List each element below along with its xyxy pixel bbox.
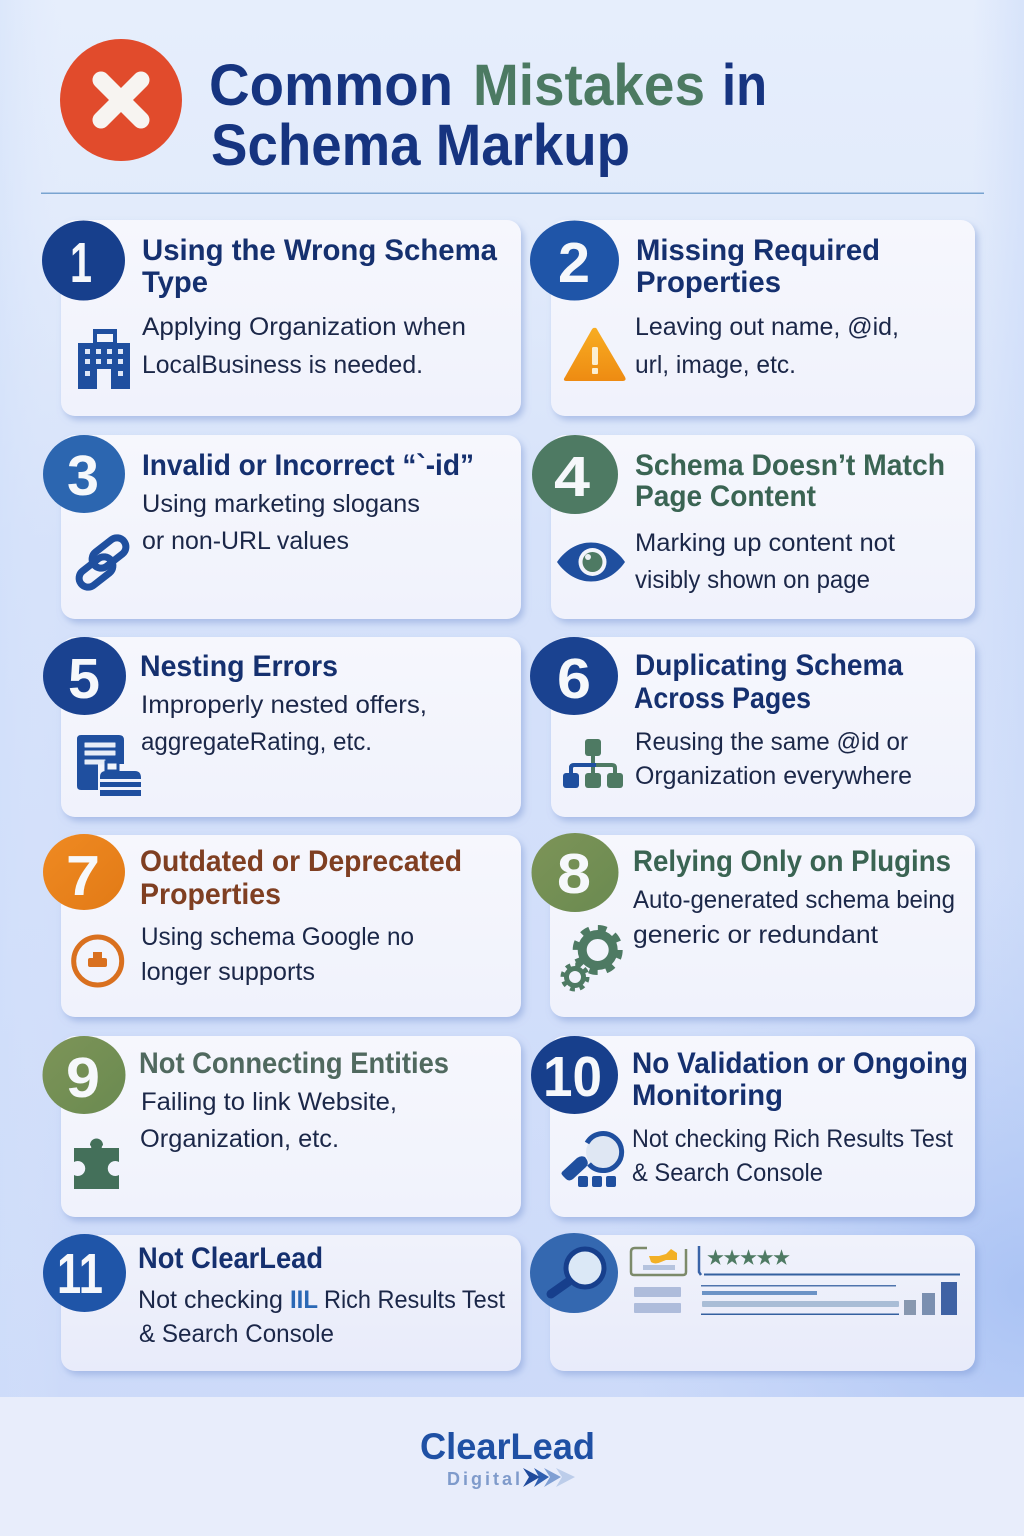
header icon: red circle with X [60, 39, 182, 161]
card 5 number badge [43, 637, 126, 715]
card 6 heading: Across Pages [634, 682, 811, 715]
card 11 body text: Rich Results Test [324, 1286, 505, 1314]
card 2 number badge [530, 220, 619, 300]
title: Mistakes [473, 53, 705, 118]
result thumbnail [631, 1248, 686, 1313]
card 4 number badge: 4 [554, 445, 590, 509]
card 7 heading: Outdated or Deprecated [140, 845, 462, 878]
card 2 number badge: 2 [558, 231, 590, 295]
card 6: duplicating schema [530, 637, 975, 817]
card 4 number badge [532, 435, 618, 514]
card 9 body text: Organization, etc. [140, 1125, 339, 1153]
card 6 number badge: 6 [557, 647, 591, 711]
card 9: not connecting entities [42, 1036, 521, 1217]
card 1 body text: LocalBusiness is needed. [142, 351, 423, 379]
card 1 heading [142, 234, 497, 299]
card 3: invalid id [43, 435, 521, 619]
card 12: rich results preview [530, 1233, 975, 1371]
card 10 panel [550, 1036, 975, 1217]
card 8 body text: Auto-generated schema being [633, 886, 955, 914]
card 5 panel [61, 637, 521, 817]
card 10 number badge: 10 [543, 1045, 602, 1109]
card 7: outdated properties [43, 834, 521, 1017]
card 11: not ClearLead [43, 1234, 521, 1371]
card 6 body text [635, 728, 912, 790]
icon: warning triangle [564, 328, 626, 381]
card 9 heading: Not Connecting Entities [139, 1047, 449, 1080]
card 8 number badge: 8 [557, 842, 591, 906]
card 8: relying only on plugins [532, 833, 975, 1017]
card 10 heading: Monitoring [632, 1079, 783, 1112]
card 11 heading: Not ClearLead [138, 1242, 323, 1275]
title: Common [209, 53, 453, 118]
card 3 panel [61, 435, 521, 619]
title [209, 53, 767, 178]
card 9 number badge: 9 [66, 1046, 100, 1110]
card 7 body text: longer supports [141, 958, 315, 986]
card 2 body text: Leaving out name, @id, [635, 313, 899, 341]
card 11 panel [61, 1235, 521, 1371]
card 11 body text: & Search Console [139, 1320, 334, 1348]
icon: sitemap hierarchy [563, 739, 623, 788]
card 7 number badge: 7 [66, 844, 100, 908]
card 12 panel [550, 1235, 975, 1371]
card 4 body text: visibly shown on page [635, 566, 870, 594]
card 4 body text [635, 529, 895, 594]
card 2 body text: url, image, etc. [635, 351, 796, 379]
card 9 number badge [42, 1036, 126, 1114]
card 2: missing required properties [530, 220, 975, 416]
icon: chain link [75, 534, 130, 591]
card 9 body text: Failing to link Website, [141, 1088, 397, 1116]
card 8 panel [550, 835, 975, 1017]
logo wordmark: ClearLead [420, 1426, 595, 1467]
card 8 heading: Relying Only on Plugins [633, 845, 951, 878]
card 10 heading [632, 1047, 968, 1112]
card 7 heading [140, 845, 462, 911]
card 7 heading: Properties [140, 878, 281, 911]
card 7 body text [141, 923, 414, 986]
card 6 heading [634, 649, 903, 715]
card 4 body text: Marking up content not [635, 529, 895, 557]
card 10 body text: Not checking Rich Results Test [632, 1125, 953, 1153]
card 11 number badge [43, 1234, 126, 1312]
card 8 body text [633, 886, 955, 949]
card 4 heading: Page Content [635, 480, 816, 513]
title: in [722, 53, 767, 118]
card 2 heading [636, 234, 880, 299]
card 5: nesting errors [43, 637, 521, 817]
star rating: ★★★★★ [707, 1247, 790, 1269]
card 9 body text [140, 1088, 397, 1153]
icon: magnifier badge [530, 1233, 618, 1313]
icon: document with stack [77, 735, 141, 796]
card 11 body text: Not checking [138, 1286, 283, 1314]
card 11 body text: IIL [290, 1286, 318, 1314]
card 5 heading: Nesting Errors [140, 650, 338, 683]
card 10 body text [632, 1125, 953, 1187]
card 3 number badge [43, 435, 125, 513]
card 4: schema does not match page content [532, 435, 975, 619]
card 7 body text: Using schema Google no [141, 923, 414, 951]
card 7 panel [61, 835, 521, 1017]
icon: office building [78, 329, 130, 389]
card 5 number badge: 5 [68, 647, 100, 711]
logo chevrons [523, 1468, 575, 1487]
card 6 number badge [530, 637, 618, 715]
icon: gears [562, 928, 620, 990]
card 10 body text: & Search Console [632, 1159, 823, 1187]
footer logo [420, 1426, 595, 1489]
card 5 body text: Improperly nested offers, [141, 691, 427, 719]
card 1 body text: Applying Organization when [142, 313, 466, 341]
card 8 body text: generic or redundant [633, 921, 878, 949]
icon: clock [74, 937, 122, 985]
card 4 heading: Schema Doesn’t Match [635, 449, 945, 482]
card 10 heading: No Validation or Ongoing [632, 1047, 968, 1080]
card 11 body text [138, 1286, 505, 1348]
card 1 number badge: 1 [70, 231, 92, 295]
card 1 heading: Type [142, 266, 208, 299]
card 7 number badge [43, 834, 125, 910]
card 8 number badge [532, 833, 618, 912]
card 10: no validation or monitoring [531, 1036, 975, 1217]
card 5 body text [141, 691, 427, 756]
card 1: wrong schema type [42, 220, 521, 416]
title: Schema Markup [211, 113, 630, 178]
icon: eye [557, 542, 625, 582]
card 1 panel [61, 220, 521, 416]
card 1 heading: Using the Wrong Schema [142, 234, 497, 267]
card 9 panel [61, 1036, 521, 1217]
card 4 panel [551, 435, 975, 619]
card 2 body text [635, 313, 899, 379]
icon: magnifier with bars [562, 1134, 622, 1187]
card 3 body text [142, 490, 420, 555]
card 11 number badge: 11 [57, 1242, 103, 1306]
card 2 heading: Properties [636, 266, 781, 299]
logo subline: Digital [447, 1469, 520, 1489]
card 10 number badge [531, 1036, 618, 1114]
icon: puzzle piece [74, 1138, 119, 1189]
card 3 body text: Using marketing slogans [142, 490, 420, 518]
card 3 heading: Invalid or Incorrect “`-id” [142, 449, 474, 482]
card 2 heading: Missing Required [636, 234, 880, 267]
card 4 heading [635, 449, 945, 513]
card 3 body text: or non-URL values [142, 527, 349, 555]
card 1 number badge [42, 220, 125, 300]
card 6 panel [551, 637, 975, 817]
card 1 body text [142, 313, 466, 379]
card 6 body text: Organization everywhere [635, 762, 912, 790]
footer band [0, 1397, 1024, 1536]
card 6 body text: Reusing the same @id or [635, 728, 908, 756]
card 6 heading: Duplicating Schema [635, 649, 903, 682]
result lines and bar chart [699, 1246, 960, 1315]
card 5 body text: aggregateRating, etc. [141, 728, 372, 756]
card 3 number badge: 3 [67, 444, 99, 508]
card 2 panel [551, 220, 975, 416]
